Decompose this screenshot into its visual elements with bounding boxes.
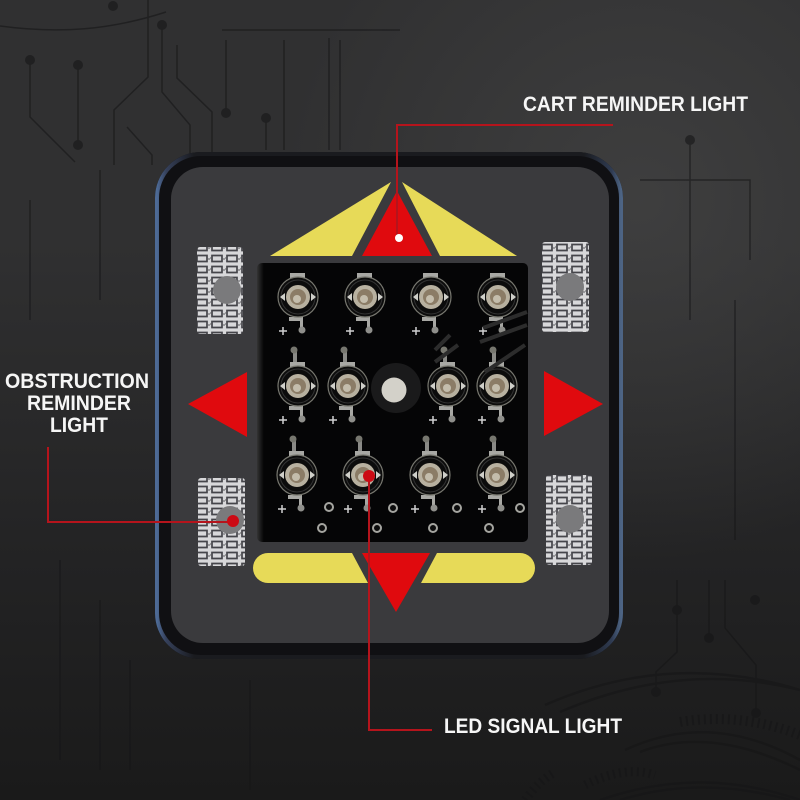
leader: obstruction reminder light: [48, 447, 239, 527]
label: LED signal light: LED SIGNAL LIGHT: [444, 715, 622, 738]
mesh sensor pads: [197, 242, 592, 566]
label: obstruction reminder light: OBSTRUCTION: [5, 370, 149, 393]
centre sensor: [371, 363, 421, 413]
LED circuit board: [257, 263, 528, 542]
leader: LED signal light: [363, 470, 432, 730]
yellow arrow segments: [253, 182, 535, 583]
label: obstruction reminder light: REMINDER: [27, 392, 131, 415]
red arrows: [188, 191, 603, 612]
label: obstruction reminder light: [5, 370, 149, 437]
label: obstruction reminder light: LIGHT: [50, 414, 108, 437]
label: cart reminder light: CART REMINDER LIGHT: [523, 93, 748, 116]
LED array: [277, 273, 518, 513]
faint reflection marks: [435, 312, 527, 372]
leader: cart reminder light: [395, 125, 613, 242]
solder points: [318, 503, 524, 532]
lamp housing: [155, 152, 623, 659]
